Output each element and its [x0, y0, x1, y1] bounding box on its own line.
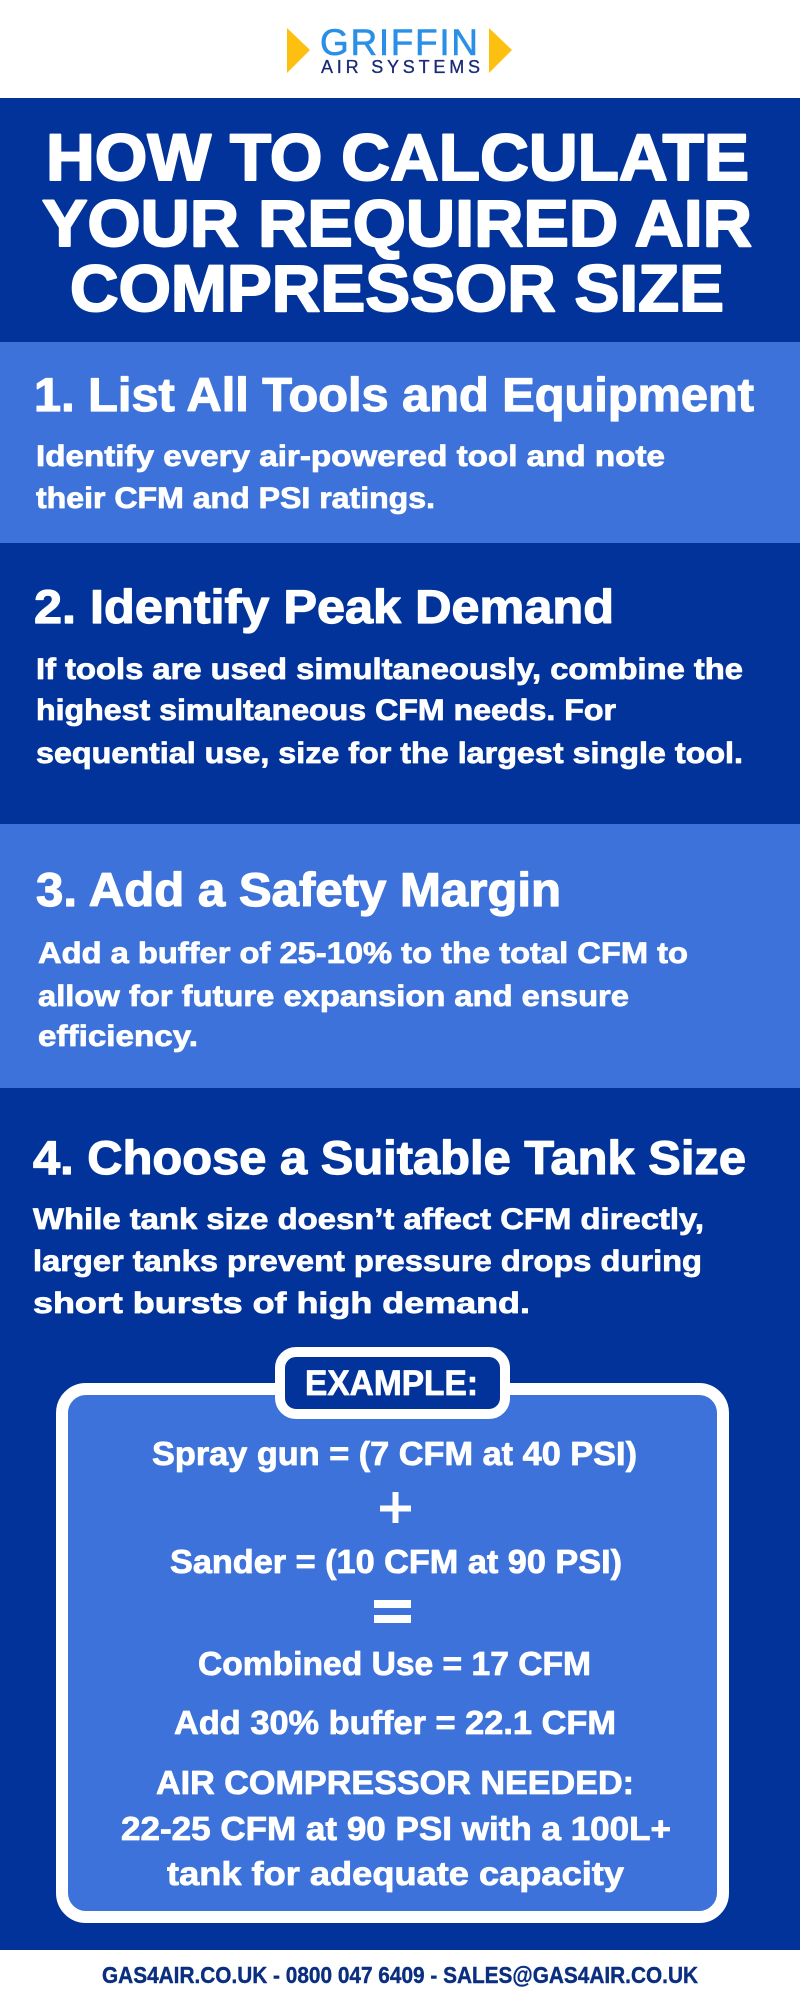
step 4 body: [33, 1203, 704, 1320]
logo: Griffin Air Systems: [287, 22, 512, 77]
result text: [121, 1764, 671, 1892]
result text: 22-25 CFM at 90 PSI with a 100L+: [121, 1810, 671, 1847]
step 4 body: short bursts of high demand.: [33, 1287, 530, 1320]
step 2 body: [36, 653, 743, 770]
step 3 body: Add a buffer of 25-10% to the total CFM to: [38, 937, 688, 970]
panel: step 4: [0, 1088, 800, 1950]
title line 2: YOUR REQUIRED AIR: [42, 186, 752, 260]
step 2 heading: 2. Identify Peak Demand: [34, 580, 614, 633]
step 2 body: sequential use, size for the largest single tool.: [36, 737, 743, 770]
title panel: [0, 98, 800, 342]
panel: step 3: [0, 824, 800, 1088]
step 1 body: [36, 440, 665, 515]
title line 3: COMPRESSOR SIZE: [70, 251, 724, 325]
step 1 body: Identify every air-powered tool and note: [36, 440, 665, 473]
result text: AIR COMPRESSOR NEEDED:: [156, 1764, 634, 1801]
panel: step 1: [0, 342, 800, 543]
icon: left yellow triangle: [287, 28, 310, 73]
step 2 body: If tools are used simultaneously, combine the: [36, 653, 743, 686]
panel: step 2: [0, 543, 800, 824]
step 1 heading: 1. List All Tools and Equipment: [34, 368, 754, 421]
step 3 heading: 3. Add a Safety Margin: [36, 863, 561, 916]
icon: plus: [380, 1492, 411, 1523]
step 4 body: While tank size doesn’t affect CFM directly,: [33, 1203, 704, 1236]
title line 1: HOW TO CALCULATE: [46, 120, 749, 194]
logo wordmark: GRIFFIN: [320, 22, 478, 63]
result text: tank for adequate capacity: [167, 1855, 625, 1892]
combined use line: Combined Use = 17 CFM: [198, 1645, 591, 1682]
step 4 body: larger tanks prevent pressure drops during: [33, 1245, 702, 1278]
icon: equals: [374, 1600, 411, 1623]
step 3 body: efficiency.: [38, 1020, 198, 1053]
step 2 body: highest simultaneous CFM needs. For: [36, 694, 616, 727]
step 3 body: [38, 937, 688, 1053]
step 3 body: allow for future expansion and ensure: [38, 980, 629, 1013]
step 1 body: their CFM and PSI ratings.: [36, 482, 435, 515]
sander line: Sander = (10 CFM at 90 PSI): [170, 1543, 622, 1580]
example tab: [280, 1352, 505, 1414]
step 4 heading: 4. Choose a Suitable Tank Size: [33, 1131, 746, 1184]
footer contact line: GAS4AIR.CO.UK - 0800 047 6409 - SALES@GAS4AIR.CO.UK: [102, 1962, 698, 1988]
spray gun line: Spray gun = (7 CFM at 40 PSI): [152, 1435, 637, 1472]
example label: EXAMPLE:: [305, 1364, 478, 1403]
icon: right yellow triangle: [489, 28, 512, 73]
buffer line: Add 30% buffer = 22.1 CFM: [174, 1704, 616, 1741]
panel: example box: [62, 1352, 723, 1917]
logo subline: AIR SYSTEMS: [321, 57, 480, 77]
